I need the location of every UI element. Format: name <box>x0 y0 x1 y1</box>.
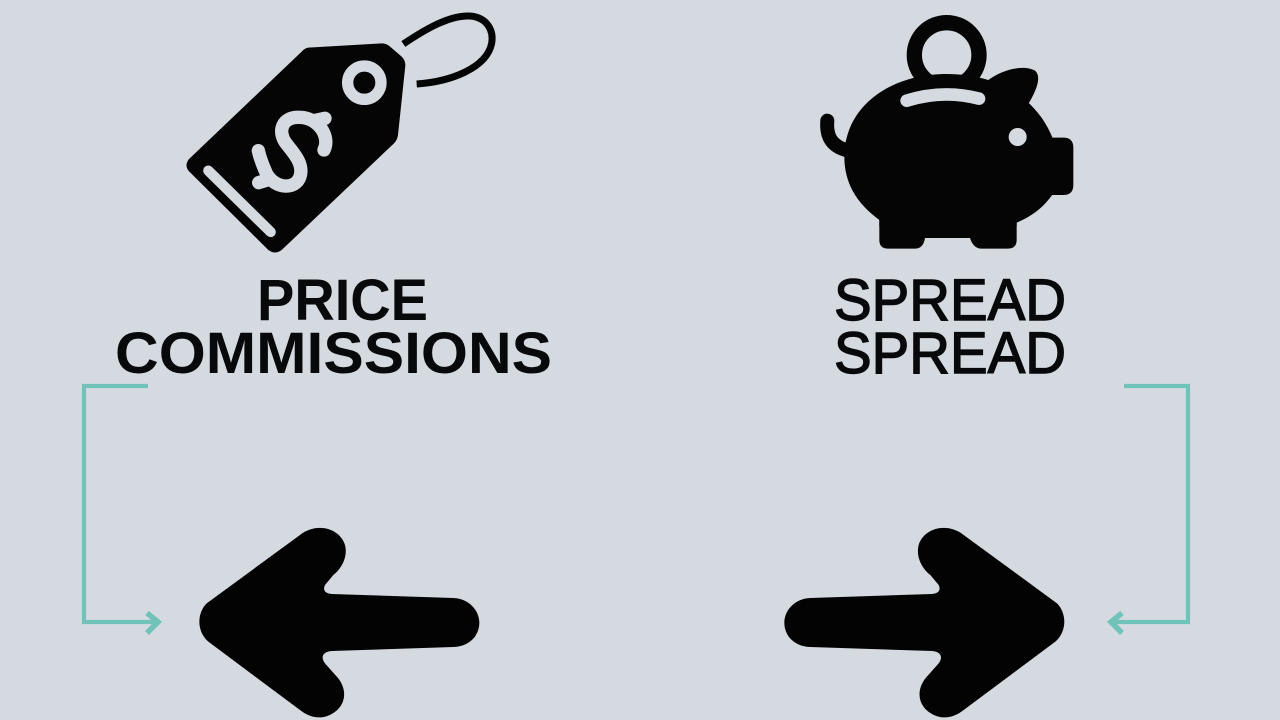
heading: price commissions: COMMISSIONS <box>115 321 552 386</box>
heading: spread spread: SPREAD <box>834 321 1066 386</box>
eye <box>1009 128 1027 146</box>
coin slot <box>907 94 979 101</box>
coin ring <box>914 23 979 87</box>
front and back legs <box>879 207 1017 249</box>
ear <box>988 68 1038 107</box>
tail <box>827 121 848 151</box>
body <box>844 74 1053 227</box>
arrow: large black right arrow <box>784 528 1064 717</box>
connector arrow: left teal bracket <box>84 386 158 633</box>
tag string <box>403 16 492 84</box>
icon: piggy bank with coin <box>827 23 1073 249</box>
heading: spread spread: SPREAD <box>834 268 1066 333</box>
heading: spread spread <box>834 268 1066 386</box>
dollar sign <box>258 117 326 186</box>
tag stripe <box>208 171 271 232</box>
tag eyelet <box>348 66 381 99</box>
arrow: large black left arrow <box>199 528 479 717</box>
icon: price tag with dollar sign <box>186 16 492 252</box>
tag body <box>186 43 405 252</box>
snout <box>1045 138 1073 195</box>
heading: price commissions: PRICE <box>257 268 428 333</box>
heading: price commissions <box>115 268 552 386</box>
connector arrow: right teal bracket <box>1111 386 1188 633</box>
